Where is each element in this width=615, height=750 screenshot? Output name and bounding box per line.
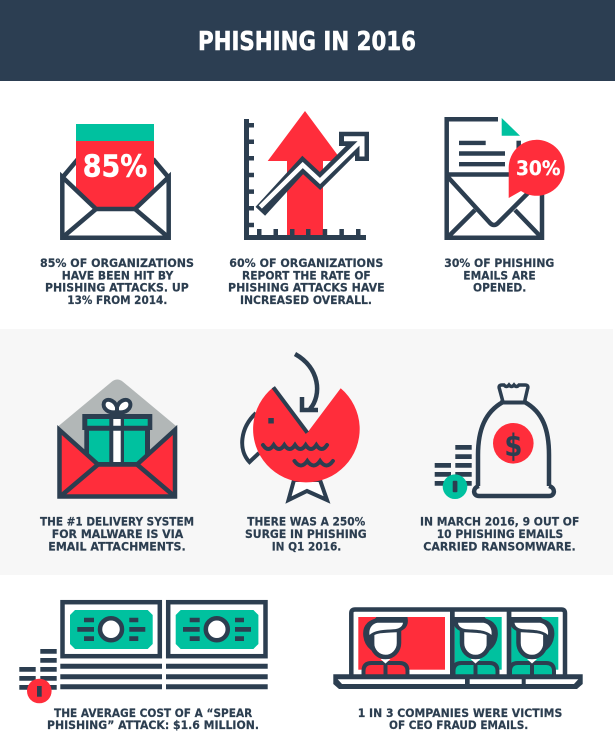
text: 60% of organizations: REPORT THE RATE OF bbox=[242, 268, 371, 282]
icon: email document with 30% bubble: 30% bbox=[516, 157, 561, 180]
panel: top row statistics bbox=[0, 81, 615, 329]
text: spear phishing cost: PHISHING” ATTACK: $1.6 MILLION. bbox=[47, 718, 259, 732]
text: 60% of organizations: 60% OF ORGANIZATIONS bbox=[229, 256, 383, 270]
header banner bbox=[0, 0, 615, 81]
text: 60% of organizations: INCREASED OVERALL. bbox=[240, 293, 372, 307]
person: third employee bbox=[510, 619, 554, 677]
text: ransomware: IN MARCH 2016, 9 OUT OF bbox=[420, 515, 579, 529]
icon: money bag with coins: $ bbox=[504, 428, 522, 464]
text: ransomware bbox=[420, 515, 579, 553]
text: spear phishing cost bbox=[47, 706, 259, 732]
text: delivery system for malware: EMAIL ATTACHMENTS. bbox=[48, 539, 186, 553]
text: 30% of phishing emails: 30% OF PHISHING bbox=[444, 256, 554, 270]
text: 30% of phishing emails: OPENED. bbox=[473, 281, 526, 295]
icon: email document with 30% bubble bbox=[446, 118, 565, 238]
icon: banknotes and coins bbox=[19, 602, 268, 703]
text: CEO fraud emails: OF CEO FRAUD EMAILS. bbox=[389, 718, 528, 732]
person: highlighted victim bbox=[364, 619, 408, 677]
text: CEO fraud emails bbox=[358, 706, 562, 732]
text: 250% surge: THERE WAS A 250% bbox=[247, 515, 366, 529]
icon: gift bow bbox=[104, 400, 130, 412]
text: 250% surge: IN Q1 2016. bbox=[272, 539, 341, 553]
text: 250% surge: SURGE IN PHISHING bbox=[245, 527, 367, 541]
text: CEO fraud emails: 1 IN 3 COMPANIES WERE VICTIMS bbox=[358, 706, 562, 720]
title: PHISHING IN 2016 bbox=[198, 27, 416, 57]
icon: open envelope with 85% card bbox=[62, 124, 169, 238]
text: delivery system for malware bbox=[40, 515, 194, 553]
text: 85% of organizations: 85% OF ORGANIZATIONS bbox=[40, 256, 194, 270]
text: ransomware: CARRIED RANSOMWARE. bbox=[423, 539, 576, 553]
text: 60% of organizations bbox=[228, 256, 385, 307]
text: 85% of organizations bbox=[40, 256, 194, 307]
icon: open envelope with 85% card: 85% bbox=[83, 150, 147, 184]
icon: rising chart with arrow bbox=[244, 111, 369, 240]
icon: laptop with three people bbox=[333, 608, 583, 689]
text: delivery system for malware: THE #1 DELIVERY SYSTEM bbox=[40, 515, 194, 529]
icon: fish with hook arrow bbox=[242, 354, 360, 500]
text: spear phishing cost: THE AVERAGE COST OF A “SPEAR bbox=[54, 706, 252, 720]
text: 85% of organizations: PHISHING ATTACKS. UP bbox=[45, 281, 189, 295]
text: 85% of organizations: HAVE BEEN HIT BY bbox=[62, 268, 174, 282]
icon: envelope with gift bbox=[57, 380, 177, 496]
text: 250% surge bbox=[245, 515, 367, 553]
text: 85% of organizations: 13% FROM 2014. bbox=[67, 293, 167, 307]
text: 30% of phishing emails: EMAILS ARE bbox=[463, 268, 536, 282]
person: second employee bbox=[454, 619, 498, 677]
icon: money bag with coins bbox=[435, 385, 554, 499]
panel: middle row statistics bbox=[0, 329, 613, 575]
text: ransomware: 10 PHISHING EMAILS bbox=[437, 527, 563, 541]
text: 60% of organizations: PHISHING ATTACKS HAVE bbox=[228, 281, 385, 295]
text: delivery system for malware: FOR MALWARE IS VIA bbox=[52, 527, 183, 541]
panel: bottom row statistics bbox=[19, 602, 583, 732]
text: 30% of phishing emails bbox=[444, 256, 554, 295]
